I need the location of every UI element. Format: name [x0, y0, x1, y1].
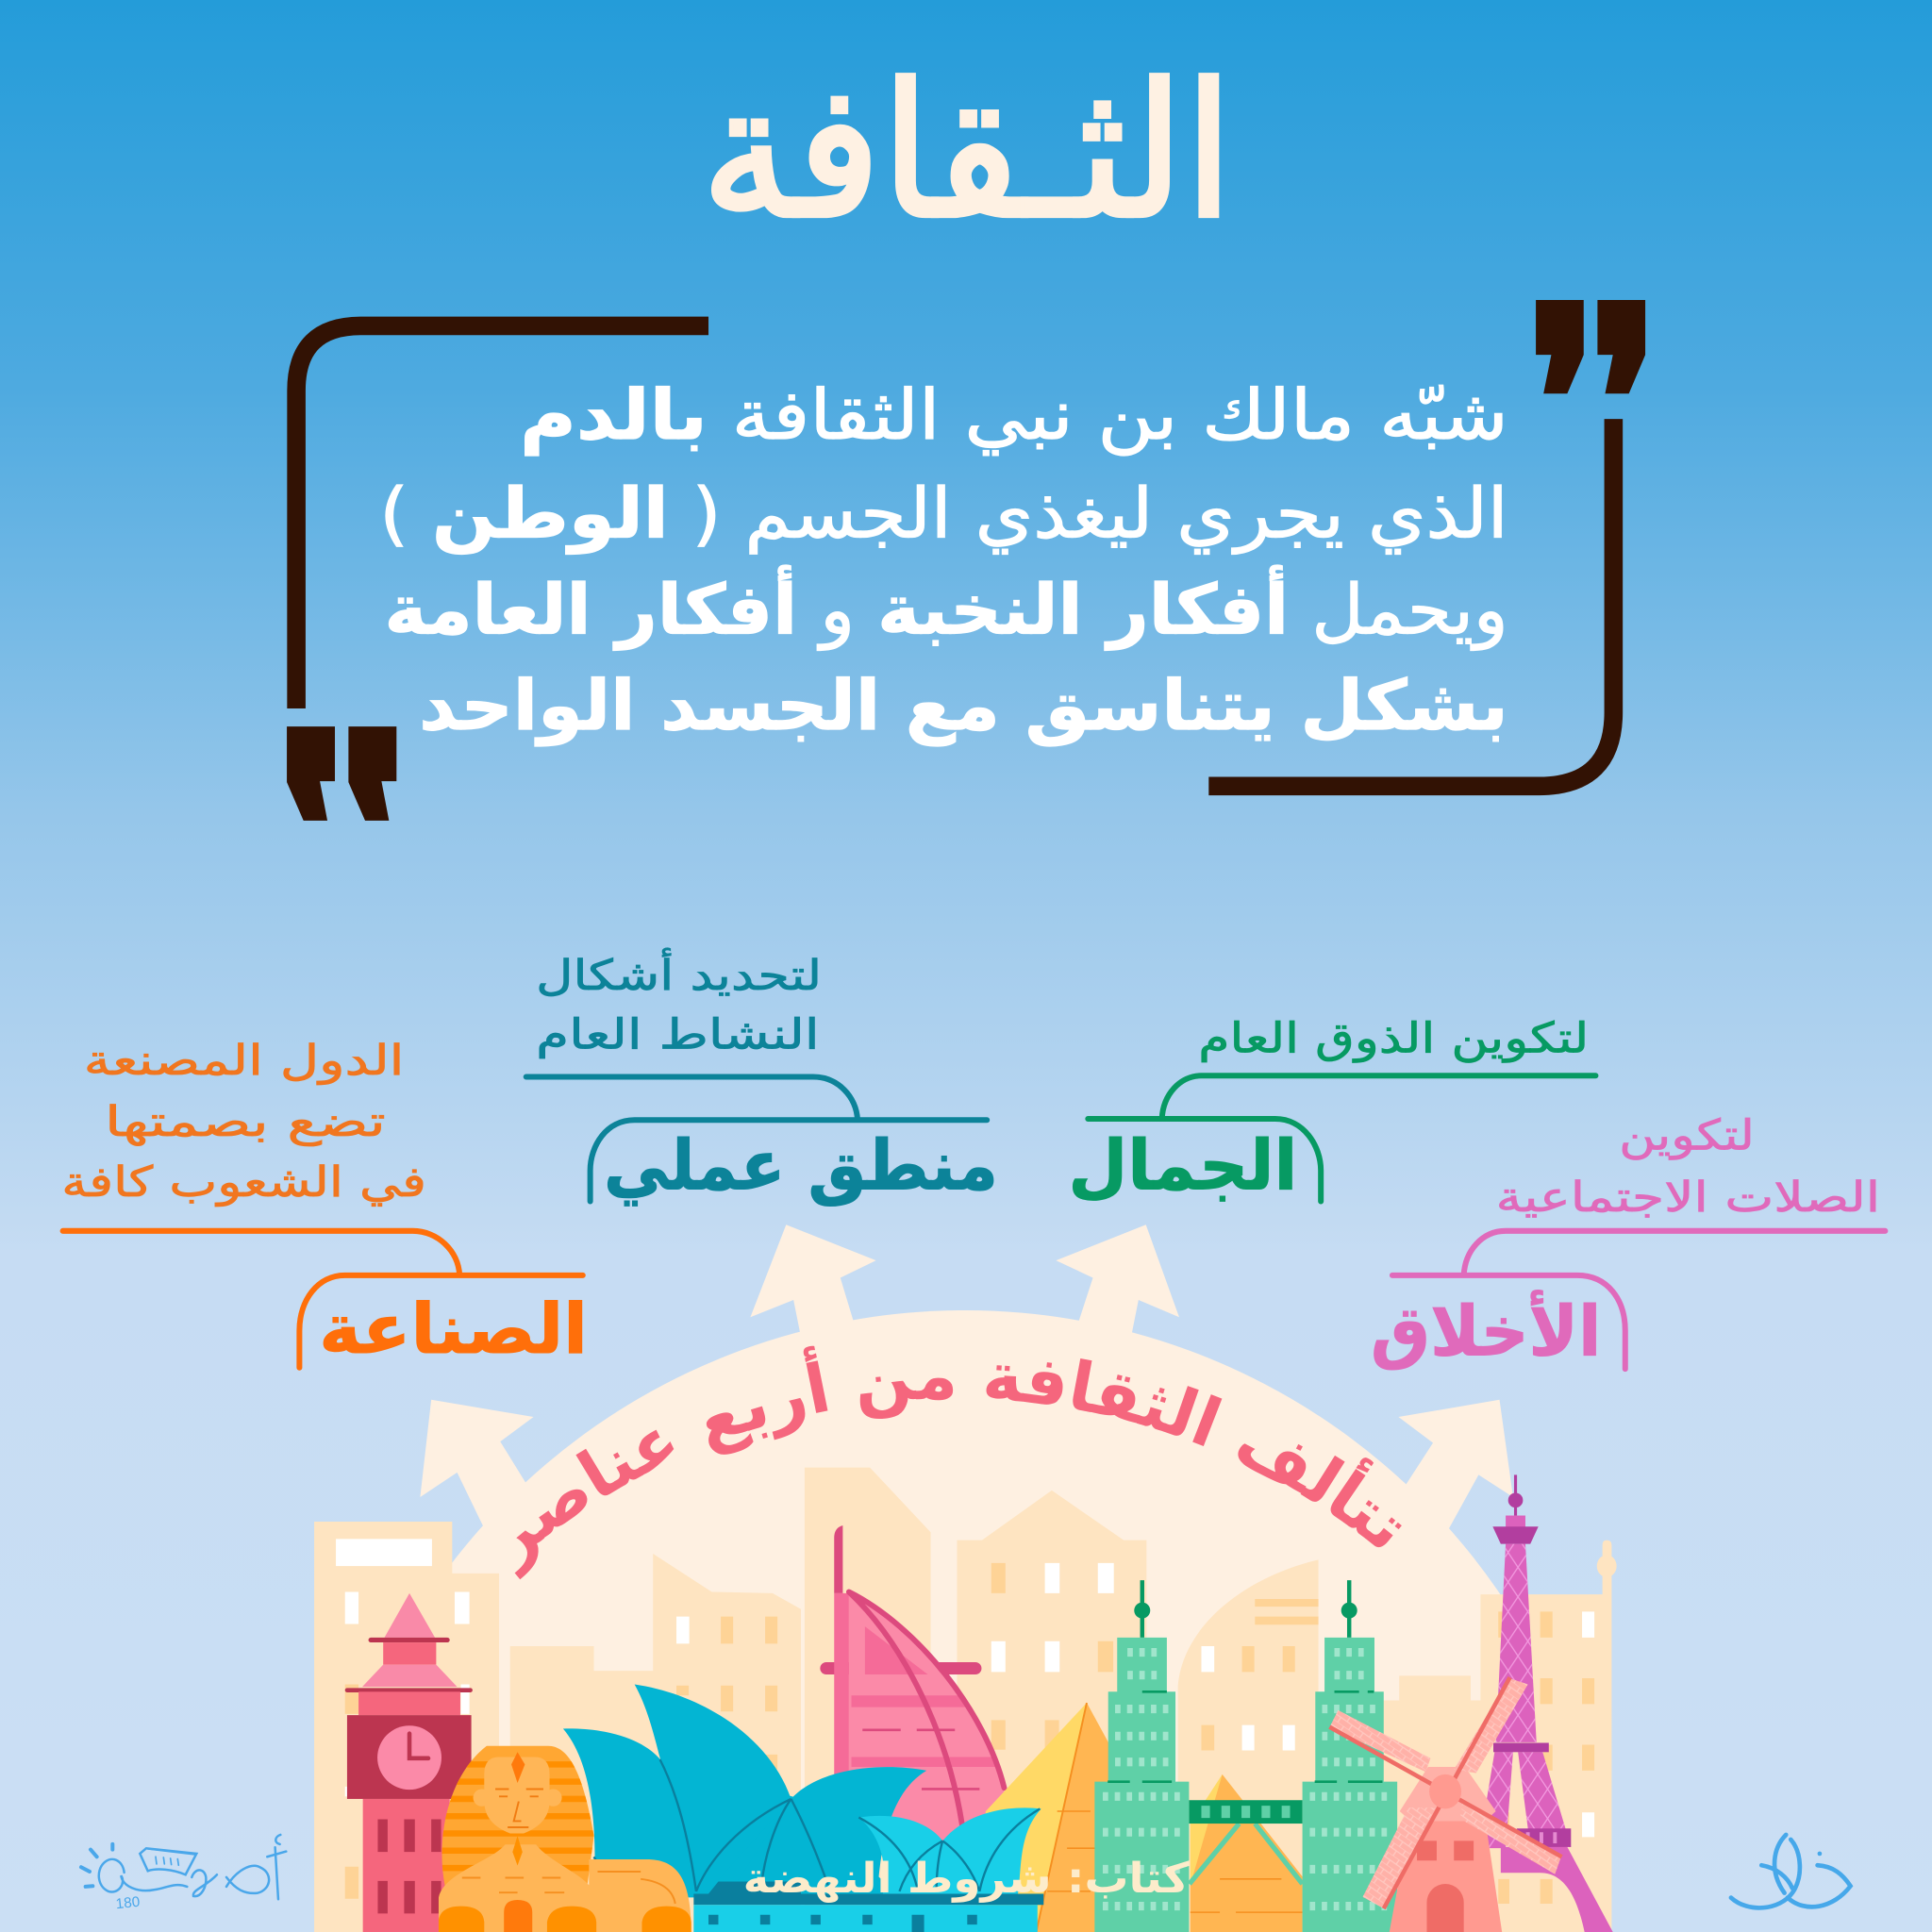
- landmark: sphinx: [431, 1746, 691, 1932]
- text: ethics description: الصلات الاجتماعية: [1496, 1174, 1880, 1222]
- building: right with spire: [1480, 1541, 1617, 1932]
- landmark: big ben: [345, 1593, 473, 1932]
- quote text: ويحمل أفكار النخبة و أفكار العامة: [385, 564, 1508, 650]
- logo: left sun and book: 180: [115, 1894, 141, 1912]
- building: domed: [1178, 1559, 1485, 1932]
- title: الثـقافة: [701, 45, 1233, 260]
- arrow: inner left: [750, 1224, 876, 1343]
- quote text: [379, 375, 1508, 746]
- arrow: outer left: [420, 1400, 542, 1546]
- building: centre tall: [805, 1468, 931, 1932]
- category: ethics: الأخلاق: [1371, 1290, 1601, 1373]
- text: beauty description: لتكوين الذوق العام: [1198, 1014, 1589, 1062]
- category: beauty: [1068, 1014, 1595, 1206]
- quote text: الذي يجري ليغذي الجسم ( الوطن ): [379, 474, 1508, 554]
- dome and upward arrows: [326, 1224, 1603, 1932]
- building: left tall: [314, 1522, 499, 1932]
- dome: [326, 1310, 1603, 1932]
- text: practical logic description: لتحديد أشكال: [536, 947, 822, 1000]
- text: ethics description: لتكوين: [1619, 1112, 1755, 1160]
- landmark: windmill: [1329, 1677, 1562, 1932]
- arrow: inner right: [1056, 1224, 1179, 1343]
- text: industry description: الدول المصنعة: [84, 1037, 404, 1085]
- building: left low and stepped: [510, 1554, 801, 1932]
- curved heading: تتألف الثقافة من أربع عناصر: [515, 1345, 1402, 1579]
- category: ethics: [1371, 1112, 1885, 1373]
- frame: top left bracket: [296, 325, 708, 708]
- text: industry description: تضع بصمتها: [105, 1098, 386, 1146]
- quote text: بشكل يتناسق مع الجسد الواحد: [419, 666, 1508, 746]
- quote panel: [287, 300, 1645, 821]
- text: ethics description: [1496, 1112, 1880, 1222]
- quote text: شبّه مالك بن نبي الثقافة بالدم: [520, 375, 1508, 456]
- blades: [1329, 1677, 1562, 1908]
- text: industry description: في الشعوب كافة: [61, 1158, 426, 1207]
- logo: left sun and book: [81, 1835, 286, 1912]
- category: industry: [61, 1037, 588, 1370]
- category: industry: الصناعة: [319, 1290, 588, 1370]
- background buildings: [314, 1468, 1617, 1932]
- icon: closing quotation marks: [1536, 300, 1645, 393]
- tower: right: [1303, 1580, 1397, 1932]
- category: practical logic: [526, 947, 998, 1206]
- frame: bottom right bracket: [1208, 419, 1613, 786]
- text: industry description: [61, 1037, 426, 1207]
- logo: right calligraphy mark: [1731, 1835, 1851, 1907]
- building: gabled: [957, 1491, 1146, 1932]
- arrow: outer right: [1390, 1400, 1513, 1546]
- tower: left: [1094, 1580, 1189, 1932]
- category: practical logic: منطق عملي: [604, 1125, 998, 1206]
- text: practical logic description: [536, 947, 822, 1059]
- icon: opening quotation marks: [287, 726, 396, 821]
- landmark: burj al arab: [820, 1525, 1004, 1848]
- category: beauty: الجمال: [1068, 1125, 1297, 1206]
- source credit: كتاب: شروط النهضة: [743, 1855, 1190, 1903]
- landmark: pyramids: [974, 1703, 1303, 1932]
- text: practical logic description: النشاط العام: [536, 1011, 820, 1059]
- landmark: eiffel tower: [1478, 1474, 1613, 1932]
- landmark: opera house: [563, 1684, 1043, 1932]
- landmark: petronas towers: [1094, 1580, 1397, 1932]
